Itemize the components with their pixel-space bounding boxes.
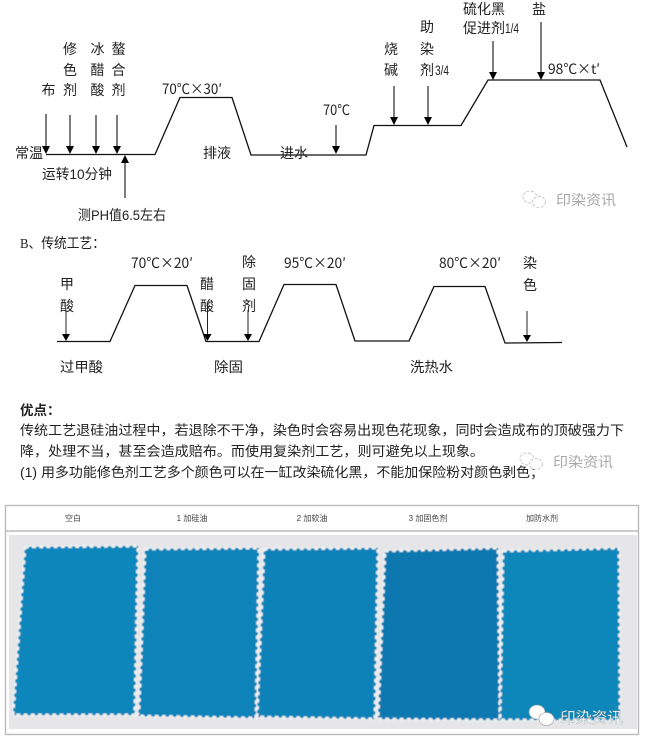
labels B: 醋	[200, 276, 214, 292]
text block: advantages: 优点：	[20, 403, 60, 418]
column headers: 空白	[65, 513, 81, 523]
labels A: 3/4	[435, 62, 449, 78]
watermark top: 印染资讯	[556, 192, 616, 208]
labels A: 染	[420, 41, 434, 57]
column headers: 加防水剂	[526, 513, 558, 523]
labels A: 醋	[90, 62, 104, 78]
arrows B	[62, 303, 531, 342]
icon: wechat top	[523, 191, 546, 208]
labels B	[60, 253, 537, 375]
labels A: 布	[42, 82, 56, 98]
process diagram A	[15, 1, 627, 223]
swatch: fixing agent	[378, 548, 500, 720]
labels B: 70℃×20′	[131, 253, 193, 273]
panel frame	[6, 506, 638, 734]
temperature curve A	[46, 80, 627, 155]
labels A: 进水	[280, 145, 308, 161]
labels A: 修	[63, 41, 77, 57]
labels A: 剂	[112, 82, 126, 98]
labels B: 剂	[242, 298, 256, 314]
swatches	[13, 546, 620, 720]
labels A: 助	[420, 19, 434, 35]
process diagram B	[57, 253, 562, 375]
labels B: 95℃×20′	[284, 253, 346, 273]
labels A: 酸	[90, 82, 104, 98]
swatch: softener	[257, 548, 378, 719]
column headers: 2 加软油	[297, 513, 327, 523]
labels A: 剂	[420, 62, 434, 78]
labels B: 除	[242, 254, 256, 270]
labels B: 固	[242, 276, 256, 292]
icon: wechat bottom	[529, 705, 554, 726]
labels A: 98℃×t′	[548, 59, 600, 79]
labels A: 70℃	[323, 100, 350, 120]
arrows A	[42, 22, 545, 198]
labels A: 烧	[384, 41, 398, 57]
labels A: 碱	[384, 62, 398, 78]
text block: advantages	[20, 403, 624, 481]
watermark bottom	[529, 705, 623, 727]
labels A: 测PH值6.5左右	[78, 207, 166, 223]
watermark top	[523, 191, 616, 208]
labels B: 甲	[60, 276, 74, 292]
temperature curve B	[57, 284, 562, 343]
labels A: 冰	[90, 41, 104, 57]
labels B: 酸	[60, 298, 74, 314]
labels B: 洗热水	[410, 359, 453, 375]
labels B: 除固	[214, 359, 243, 375]
labels A: 合	[112, 62, 126, 78]
labels A: 盐	[532, 1, 546, 17]
labels A: 硫化黑	[463, 1, 505, 17]
heading B: B、传统工艺：	[20, 236, 105, 252]
icon: wechat middle	[520, 453, 542, 470]
labels A: 70℃×30′	[162, 79, 222, 99]
labels B: 染	[523, 255, 537, 271]
photo panel: fabric swatches	[5, 506, 639, 734]
labels A: 色	[63, 62, 77, 78]
column headers	[65, 513, 558, 523]
swatch: blank	[13, 546, 138, 715]
labels A: 常温	[15, 145, 43, 161]
labels A: 1/4	[505, 20, 519, 36]
watermark bottom: 印染资讯	[560, 709, 623, 727]
photo background	[9, 535, 637, 729]
text block: advantages: (1) 用多功能修色剂工艺多个颜色可以在一缸改染硫化黑，不能加保险粉对颜色剥色；	[20, 464, 544, 481]
labels A: 运转10分钟	[42, 166, 112, 182]
labels B: 色	[523, 277, 537, 293]
labels B: 80℃×20′	[439, 253, 501, 273]
watermark middle: 印染资讯	[553, 454, 613, 470]
column headers: 1 加硅油	[177, 513, 207, 523]
labels B: 过甲酸	[60, 359, 103, 375]
labels B: 酸	[200, 298, 214, 314]
labels A	[15, 1, 600, 223]
labels A: 螯	[112, 41, 126, 57]
text block: advantages: 传统工艺退硅油过程中，若退除不干净，染色时会容易出现色花现象，同时会造成布的顶破强力下	[20, 422, 624, 438]
swatch: waterproofing agent	[500, 548, 620, 720]
text block: advantages: 降，处理不当，甚至会造成赔布。而使用复染剂工艺，则可避免以上现象。	[20, 443, 484, 459]
labels A: 排液	[203, 145, 231, 161]
watermark middle	[520, 453, 613, 470]
labels A: 促进剂	[463, 20, 505, 36]
swatch: silicone oil	[137, 548, 259, 718]
column headers: 3 加固色剂	[409, 513, 447, 523]
labels A: 剂	[63, 82, 77, 98]
